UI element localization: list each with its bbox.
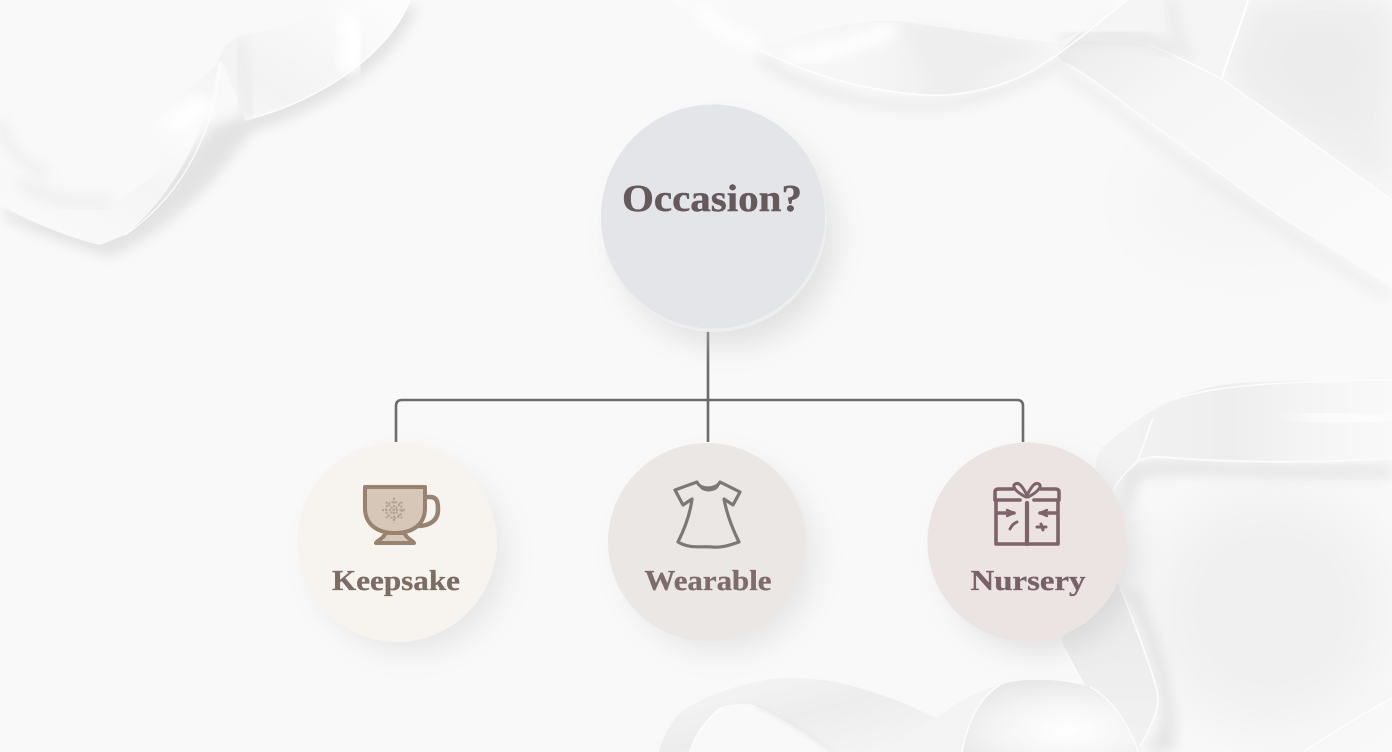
icon: baby dress — [675, 482, 740, 547]
ribbon: right side fold — [1096, 380, 1392, 520]
node: Nursery — [928, 442, 1136, 652]
ribbon: top centre twist — [672, 0, 1127, 106]
ribbon: bottom loops — [659, 678, 1138, 752]
heading: Occasion?: Occasion? — [622, 178, 802, 220]
node: Wearable — [608, 443, 816, 652]
label: Nursery: Nursery — [970, 565, 1086, 597]
ribbon: top right, upright strand — [1061, 0, 1392, 190]
label: Wearable: Wearable — [644, 565, 772, 597]
ribbon: top left — [0, 0, 417, 257]
node: Occasion? — [601, 104, 836, 346]
ribbon: lower vertical strand — [1060, 575, 1176, 752]
label: Keepsake: Keepsake — [332, 565, 460, 597]
ribbon: lower right strand — [1255, 682, 1392, 752]
icon: gift box — [995, 483, 1059, 544]
node: Keepsake — [297, 442, 506, 652]
ribbon: top right, long band — [1040, 36, 1392, 295]
icon: teacup — [365, 487, 438, 543]
connector lines — [396, 330, 1023, 442]
